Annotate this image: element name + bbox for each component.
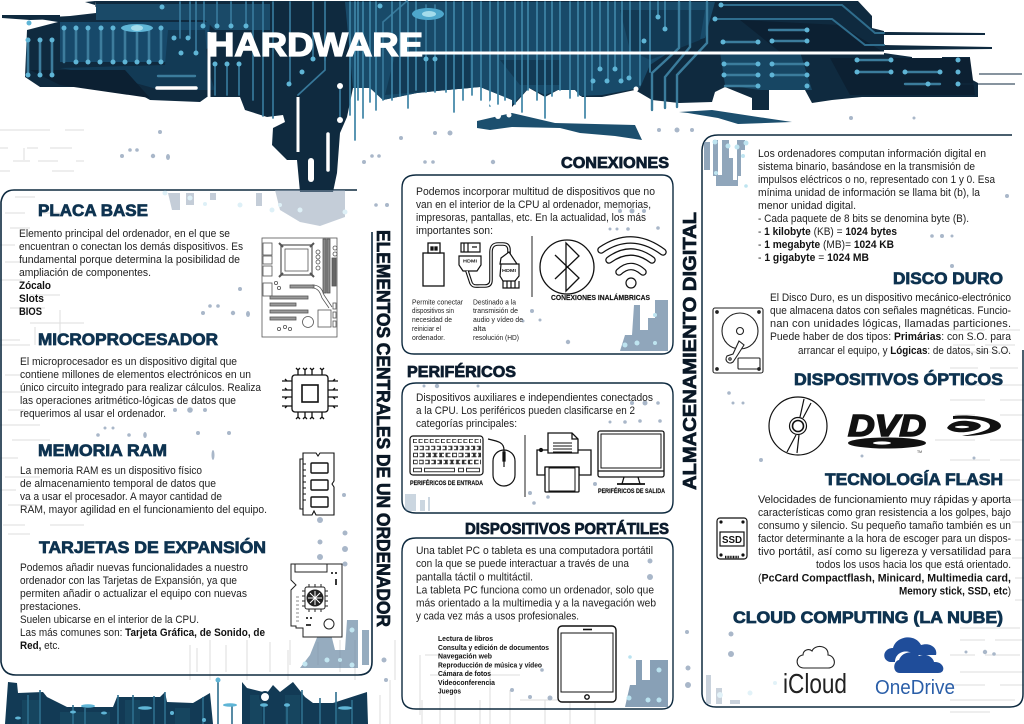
text: tecnologia flash: consumo y silencio. Su pequeño tamaño también es un xyxy=(758,520,1011,532)
icon: blu-ray logo xyxy=(947,416,1001,436)
text: sistema binario: - 1 gigabyte = 1024 MB xyxy=(758,252,869,264)
list: usos de tableta: Navegación web xyxy=(438,652,493,660)
text: placa base: encuentran o conectan los demás dispositivos. Es xyxy=(19,241,243,253)
panel drip: conexiones corner xyxy=(620,300,668,351)
text: conexiones: impresoras, pantallas, etc. En la actualidad, los más xyxy=(416,212,646,224)
skyline traces xyxy=(28,680,352,724)
white splash holes xyxy=(308,86,638,182)
panel drip: almacenamiento bottom-left xyxy=(706,675,777,704)
label: conexiones inalambricas: CONEXIONES INALÁMBRICAS xyxy=(551,293,650,302)
text: hdmi caption: transmisión de xyxy=(473,306,518,315)
bottom circuit skyline xyxy=(5,678,368,724)
text: usb caption: reiniciar el xyxy=(412,324,441,333)
text: portatiles: Una tablet PC o tableta es una computadora portátil xyxy=(416,545,653,557)
banner silhouette xyxy=(25,1,978,192)
heading: memoria ram: MEMORIA RAM xyxy=(38,442,167,460)
icon: dvd logo: TM xyxy=(917,450,922,454)
text: tarjetas: permiten añadir o actualizar el equipo con nuevas xyxy=(20,588,247,600)
drip islands xyxy=(477,110,792,140)
circuit pads xyxy=(26,2,960,88)
text: tecnologia flash: Velocidades de funcionamiento muy rápidas y aporta xyxy=(758,494,1012,506)
panel drip: left bottom-right xyxy=(300,620,369,668)
text: placa base xyxy=(19,228,243,318)
icon: motherboard xyxy=(262,238,337,337)
circuit traces xyxy=(28,1,940,140)
icon: dvd logo xyxy=(848,408,926,454)
text: sistema binario: - Cada paquete de 8 bits se denomina byte (B). xyxy=(758,213,969,225)
text: perifericos: Dispositivos auxiliares e independientes conectados xyxy=(416,392,653,404)
text: microprocesador: contiene millones de elementos electrónicos en un xyxy=(20,369,251,381)
text: placa base: Slots xyxy=(19,293,44,305)
list: usos de tableta: Lectura de libros xyxy=(438,634,493,643)
icon: monitor xyxy=(598,431,664,484)
text: usb caption xyxy=(412,298,464,342)
text: disco duro: nan con unidades lógicas, llamadas particiones. xyxy=(770,318,1011,330)
text: disco duro xyxy=(770,292,1012,357)
list: usos de tableta: Videoconferencia xyxy=(438,678,496,687)
icon: ram module xyxy=(300,453,334,515)
text: conexiones xyxy=(416,186,655,237)
text: sistema binario: sistema binario, basándose en la transmisión de xyxy=(758,161,975,173)
text: placa base: BIOS xyxy=(19,306,42,318)
text: memoria ram: La memoria RAM es un dispositivo físico xyxy=(20,465,202,477)
heading: conexiones: CONEXIONES xyxy=(561,155,669,172)
text: hdmi caption: audio y vídeo de xyxy=(473,315,523,324)
text: tarjetas: Las más comunes son: Tarjeta Gráfica, de Sonido, de xyxy=(20,627,265,639)
text: placa base: fundamental porque determina la posibilidad de xyxy=(19,254,240,266)
text: sistema binario: - 1 megabyte (MB)= 1024 KB xyxy=(758,239,894,251)
skyline silhouette xyxy=(5,682,368,724)
text: sistema binario: - 1 kilobyte (KB) = 1024 bytes xyxy=(758,226,897,238)
text: conexiones: van en el interior de la CPU al ordenador, memorias, xyxy=(416,199,651,211)
scattered speckles xyxy=(96,116,1009,700)
label: perifericos de entrada: PERIFÉRICOS DE ENTRADA xyxy=(410,479,484,487)
icon: expansion card xyxy=(291,564,342,637)
text: tecnologia flash: Memory stick, SSD, etc) xyxy=(899,586,1011,598)
text: microprocesador: las operaciones aritmético-lógicas de datos que xyxy=(20,395,236,407)
icon: wifi xyxy=(601,240,663,288)
text: tarjetas: prestaciones. xyxy=(20,601,81,613)
text: usb caption: ordenador. xyxy=(412,333,445,342)
text: memoria ram: de almacenamiento temporal de datos que xyxy=(20,478,216,490)
divider: conexiones xyxy=(531,236,533,297)
label: perifericos de salida: PERIFÉRICOS DE SALIDA xyxy=(598,487,666,495)
heading: perifericos: PERIFÉRICOS xyxy=(407,364,516,381)
text: placa base: Elemento principal del ordenador, en el que se xyxy=(19,228,230,240)
text: disco duro: arrancar el equipo, y Lógicas: de datos, sin S.O. xyxy=(798,345,1011,357)
text: tarjetas: ordenador con las Tarjetas de Expansión, ya que xyxy=(20,575,237,587)
text: perifericos: categorías principales: xyxy=(416,418,517,430)
text: microprocesador: único circuito integrado para realizar cálculos. Realiza xyxy=(20,382,262,394)
panel: elementos centrales xyxy=(1,190,372,675)
icon: dvd logo: DVD xyxy=(848,408,926,443)
icon: ssd: SSD xyxy=(722,535,742,546)
text: tarjetas: Red, etc. xyxy=(20,640,60,652)
list: usos de tableta xyxy=(438,634,549,696)
text: disco duro: Puede haber de dos tipos: Primárias: con S.O. para xyxy=(770,331,1012,343)
text: sistema binario: Los ordenadores computan información digital en xyxy=(758,148,986,160)
panel drip: left top-right xyxy=(162,190,348,226)
panel: portatiles xyxy=(402,538,673,709)
icon: tablet xyxy=(558,626,616,702)
list: usos de tableta: Consulta y edición de documentos xyxy=(438,643,549,652)
heading: dispositivos opticos: DISPOSITIVOS ÓPTICOS xyxy=(794,370,1003,389)
white rule lines xyxy=(209,32,884,152)
icon: hdmi cable xyxy=(459,243,519,288)
text: usb caption: dispositivos sin xyxy=(412,306,454,315)
panel: conexiones xyxy=(402,175,673,354)
icon: cpu chip xyxy=(282,368,338,419)
icon: ssd xyxy=(717,518,747,559)
heading: tecnologia flash: TECNOLOGÍA FLASH xyxy=(825,470,1003,489)
icon: onedrive: OneDrive xyxy=(875,677,955,699)
panel drip: perifericos corner xyxy=(405,494,430,511)
divider: perifericos xyxy=(524,435,526,497)
text: usb caption: necesidad de xyxy=(412,315,452,324)
text: tecnologia flash xyxy=(758,494,1012,598)
list: usos de tableta: Juegos xyxy=(438,686,461,696)
text: hdmi caption: resolución (HD) xyxy=(473,333,519,342)
icon: icloud xyxy=(783,646,847,699)
text: sistema binario: impulsos eléctricos o no, representado con 1 y 0. Esa xyxy=(758,174,996,186)
icon: icloud: iCloud xyxy=(783,668,847,699)
text: hdmi caption: alta xyxy=(473,324,486,333)
text: hdmi caption xyxy=(473,298,523,342)
icon: hard disk xyxy=(713,308,763,373)
text: disco duro: El Disco Duro, es un dispositivo mecánico-electrónico xyxy=(770,292,1011,304)
text: tecnologia flash: tivo portátil, así como su ligereza y versatilidad para xyxy=(758,546,1012,558)
skyline mid-tone xyxy=(22,695,350,724)
text: conexiones: importantes son: xyxy=(416,225,493,237)
text: tecnologia flash: características como gran resistencia a los golpes, bajo xyxy=(758,507,1011,519)
text: placa base: ampliación de componentes. xyxy=(19,267,151,279)
text: tecnologia flash: (PcCard Compactflash, Minicard, Multimedia card, xyxy=(758,572,1011,584)
title: HARDWARE xyxy=(208,26,423,63)
text: hdmi caption: Destinado a la xyxy=(473,298,516,306)
text: microprocesador: El microprocesador es un dispositivo digital que xyxy=(20,356,237,368)
thin right lines xyxy=(958,74,1022,84)
text: portatiles: más orientado a la multimedia y a la navegación web xyxy=(416,598,656,610)
icon: hdmi cable: HDMI xyxy=(502,268,516,273)
text: microprocesador xyxy=(20,356,262,420)
text: memoria ram: va a usar el procesador. A mayor cantidad de xyxy=(20,491,222,503)
panel drip: almacenamiento top-left xyxy=(704,140,748,188)
text: portatiles: La tableta PC funciona como un ordenador, solo que xyxy=(416,584,654,596)
top-left stripes xyxy=(2,1,992,50)
text: memoria ram: RAM, mayor agilidad en el funcionamiento del equipo. xyxy=(20,504,267,516)
list: usos de tableta: Cámara de fotos xyxy=(438,669,491,678)
text: tarjetas xyxy=(20,562,265,652)
icon: printer xyxy=(537,433,591,492)
text: usb caption: Permite conectar xyxy=(412,298,464,306)
skyline ring xyxy=(260,692,270,702)
text: portatiles: y cada vez más a usos profesionales. xyxy=(416,610,579,622)
banner mid-tone areas xyxy=(30,2,975,105)
icon: onedrive xyxy=(875,637,955,699)
icon: keyboard xyxy=(410,436,483,475)
icon: cd disc xyxy=(769,397,827,455)
icon: mouse xyxy=(488,439,515,486)
text: tarjetas: Podemos añadir nuevas funcionalidades a nuestro xyxy=(20,562,248,574)
heading: cloud computing: CLOUD COMPUTING (LA NUBE) xyxy=(733,609,1003,627)
heading: disco duro: DISCO DURO xyxy=(893,270,1003,288)
heading: microprocesador: MICROPROCESADOR xyxy=(38,331,218,349)
white bone marks xyxy=(157,88,328,170)
text: portatiles: con la que se puede interactuar a través de una xyxy=(416,558,630,570)
text: portatiles xyxy=(416,545,656,622)
vertical title: almacenamiento digital: ALMACENAMIENTO DIGITAL xyxy=(680,212,700,490)
text: tecnologia flash: todos los usos hacia los que está orientado. xyxy=(816,559,1011,571)
heading: dispositivos portatiles: DISPOSITIVOS PORTÁTILES xyxy=(465,521,669,538)
text: sistema binario xyxy=(758,148,996,264)
list: usos de tableta: Reproducción de música y vídeo xyxy=(438,660,543,670)
text: microprocesador: requerimos al usar el ordenador. xyxy=(20,408,166,420)
text: perifericos xyxy=(416,392,653,430)
panel: almacenamiento xyxy=(702,135,1023,707)
text: memoria ram xyxy=(20,465,267,516)
icon: usb stick xyxy=(423,243,444,286)
text: conexiones: Podemos incorporar multitud de dispositivos que no xyxy=(416,186,655,198)
vertical title: elementos centrales: ELEMENTOS CENTRALES DE UN ORDENADOR xyxy=(373,230,393,627)
icon: hdmi cable: HDMI xyxy=(463,258,477,264)
top circuit banner xyxy=(2,1,1022,192)
text: sistema binario: mínima unidad de información se llama bit (b), la xyxy=(758,187,981,199)
heading: tarjetas de expansion: TARJETAS DE EXPANSIÓN xyxy=(39,538,266,557)
text: perifericos: a la CPU. Los periféricos pueden clasificarse en 2 xyxy=(416,405,635,417)
text: placa base: Zócalo xyxy=(19,280,51,292)
text: tarjetas: Suelen ubicarse en el interior de la CPU. xyxy=(20,614,199,626)
panel: perifericos xyxy=(402,383,673,513)
skyline pads xyxy=(15,678,352,722)
panel drip: portatiles corner xyxy=(625,655,668,707)
text: sistema binario: menor unidad digital. xyxy=(758,200,856,212)
heading: placa base: PLACA BASE xyxy=(38,202,148,220)
text: portatiles: pantalla táctil o multitáctil. xyxy=(416,572,533,584)
top-left white stripe xyxy=(0,7,96,13)
icon: bluetooth xyxy=(540,240,594,294)
